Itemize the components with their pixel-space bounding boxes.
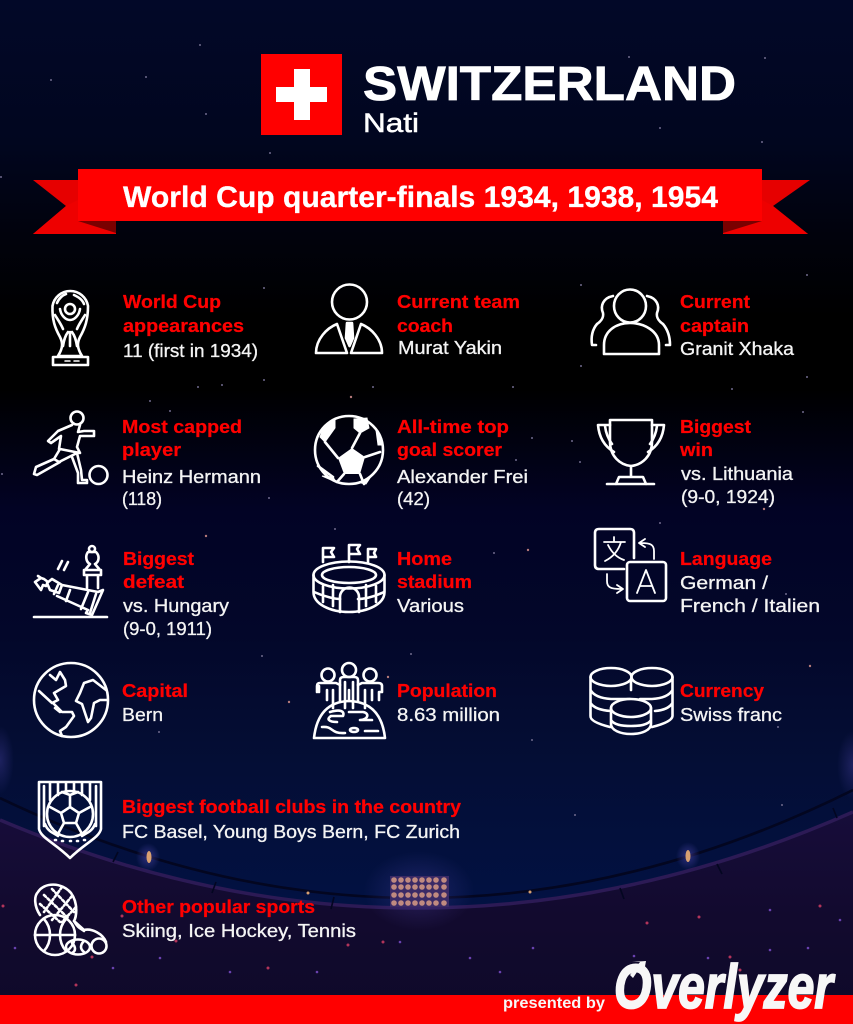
stat: top goal scorer [315, 416, 528, 509]
icon: Swiss flag [261, 54, 342, 135]
value line 2: (42) [397, 489, 430, 509]
presented by label: presented by [503, 995, 605, 1012]
value line 2: (9-0, 1911) [123, 619, 212, 639]
title: SWITZERLAND [363, 58, 736, 111]
value: 11 (first in 1934) [123, 341, 258, 361]
icon: club crest [39, 782, 101, 858]
heading line 2: win [679, 439, 713, 460]
icon: soccer ball [315, 416, 383, 484]
heading: Population [397, 680, 497, 701]
heading line 2: defeat [123, 571, 184, 592]
heading line 2: captain [680, 315, 749, 336]
icon: sports equipment [35, 885, 106, 955]
heading: All-time top [397, 416, 509, 437]
icon: chess king falling [34, 546, 107, 617]
value: Bern [122, 705, 163, 725]
heading: Home [397, 548, 452, 569]
heading: Current team [397, 291, 520, 312]
value: Murat Yakin [398, 338, 502, 358]
stat: currency [590, 668, 782, 734]
heading line 2: player [122, 439, 181, 460]
heading: World Cup [123, 291, 221, 312]
heading line 2: appearances [123, 315, 244, 336]
icon: football player [34, 412, 108, 484]
value: Skiing, Ice Hockey, Tennis [122, 921, 356, 941]
icon: trophy cup [598, 420, 664, 484]
value: Heinz Hermann [122, 467, 261, 487]
value line 2: (9-0, 1924) [681, 487, 775, 507]
subtitle: Nati [363, 108, 419, 138]
value line 2: (118) [122, 489, 162, 509]
value: Swiss franc [680, 705, 782, 725]
floodlight [364, 851, 474, 931]
icon: people on a globe [314, 663, 385, 738]
icon: stadium [314, 545, 384, 612]
heading: Language [680, 548, 772, 569]
value: Various [397, 596, 464, 616]
stat: other popular sports [35, 885, 356, 955]
stat: language [595, 529, 820, 616]
heading: Biggest [123, 548, 194, 569]
footer bar [0, 995, 853, 1024]
value: German / [680, 573, 768, 593]
icon: globe [34, 663, 108, 737]
heading: Currency [680, 680, 765, 701]
heading: Most capped [122, 416, 242, 437]
stat: World Cup appearances [52, 291, 258, 365]
value: 8.63 million [397, 705, 500, 725]
heading: Current [680, 291, 750, 312]
banner text: World Cup quarter-finals 1934, 1938, 1954 [123, 181, 719, 214]
value: FC Basel, Young Boys Bern, FC Zurich [122, 822, 460, 842]
heading: Biggest football clubs in the country [122, 796, 462, 817]
stat: biggest defeat [34, 546, 229, 639]
value: vs. Lithuania [681, 464, 794, 484]
stat: home stadium [314, 545, 472, 616]
stat: biggest win [598, 416, 794, 507]
heading: Other popular sports [122, 896, 315, 917]
stat: captain [592, 290, 795, 359]
stat: biggest football clubs [39, 782, 462, 858]
stat: population [314, 663, 500, 738]
value: Alexander Frei [397, 467, 528, 487]
icon: man in suit [316, 284, 382, 353]
value line 2: French / Italien [680, 596, 820, 616]
heading line 2: coach [397, 315, 453, 336]
banner ribbon [33, 169, 810, 234]
heading: Capital [122, 680, 188, 701]
icon: World Cup trophy [52, 291, 88, 365]
stat: capital [34, 663, 188, 737]
value: vs. Hungary [123, 596, 229, 616]
value: Granit Xhaka [680, 339, 795, 359]
heading: Biggest [680, 416, 751, 437]
icon: translation [595, 529, 666, 601]
heading line 2: goal scorer [397, 439, 502, 460]
stadium roof and stands [0, 790, 853, 1024]
icon: coin stacks [590, 668, 672, 734]
stat: most capped player [34, 412, 261, 509]
stat: coach [316, 284, 520, 358]
heading line 2: stadium [397, 571, 472, 592]
icon: group of people [592, 290, 670, 354]
